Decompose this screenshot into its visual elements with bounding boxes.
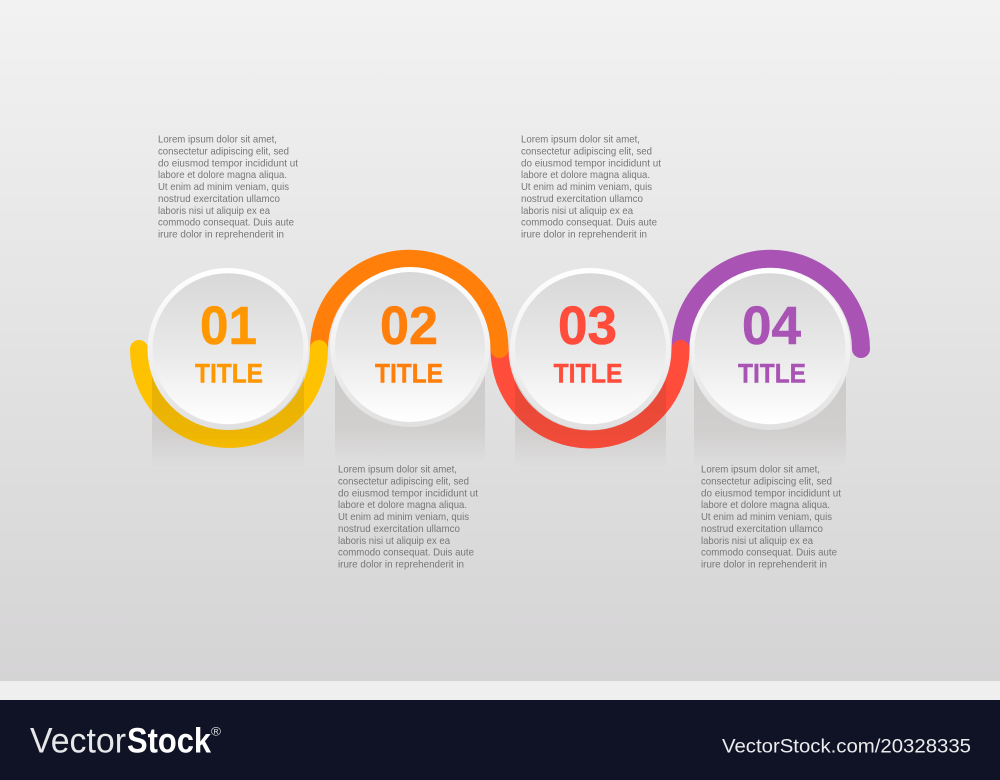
logo wordmark: Stock xyxy=(127,722,211,761)
title 01: TITLE xyxy=(195,359,263,389)
footer bar xyxy=(0,700,1000,780)
ring 01 xyxy=(148,268,308,430)
step 03 circle xyxy=(510,268,671,430)
title 04: TITLE xyxy=(738,359,806,389)
text block 02: consectetur adipiscing elit, sed xyxy=(338,475,469,487)
text block 02: Lorem ipsum dolor sit amet, xyxy=(338,464,457,476)
text block 02: do eiusmod tempor incididunt ut xyxy=(338,487,478,499)
orange arc 02 xyxy=(319,259,500,349)
red arc 03 xyxy=(500,349,680,440)
number 02: 02 xyxy=(380,296,438,356)
text block 03: labore et dolore magna aliqua. xyxy=(521,169,650,181)
text block 01: irure dolor in reprehenderit in xyxy=(158,228,284,240)
image id: VectorStock.com/20328335 xyxy=(722,737,971,758)
text block 01: laboris nisi ut aliquip ex ea xyxy=(158,205,270,217)
logo wordmark: ® xyxy=(211,724,221,738)
text block 03: irure dolor in reprehenderit in xyxy=(521,228,647,240)
text block 04: do eiusmod tempor incididunt ut xyxy=(701,487,841,499)
step 04 circle xyxy=(690,268,850,430)
text block 04: commodo consequat. Duis aute xyxy=(701,547,837,559)
text block 04: Ut enim ad minim veniam, quis xyxy=(701,511,832,523)
text block 03 xyxy=(521,134,661,240)
shadow 01 xyxy=(152,349,304,467)
face 04 xyxy=(694,273,846,424)
ring 04 xyxy=(690,268,850,430)
text block 03: commodo consequat. Duis aute xyxy=(521,217,657,229)
light band xyxy=(0,681,1000,700)
text block 01: nostrud exercitation ullamco xyxy=(158,193,280,205)
number 04: 04 xyxy=(742,296,801,356)
text block 03: Lorem ipsum dolor sit amet, xyxy=(521,134,640,146)
step 02 circle xyxy=(330,267,490,427)
logo wordmark xyxy=(30,722,221,761)
text block 01: Lorem ipsum dolor sit amet, xyxy=(158,134,277,146)
ring 02 xyxy=(330,267,490,427)
title 03: TITLE xyxy=(554,359,622,389)
text block 03: consectetur adipiscing elit, sed xyxy=(521,145,652,157)
text block 01: commodo consequat. Duis aute xyxy=(158,217,294,229)
text block 01: Ut enim ad minim veniam, quis xyxy=(158,181,289,193)
text block 03: laboris nisi ut aliquip ex ea xyxy=(521,205,633,217)
text block 01: consectetur adipiscing elit, sed xyxy=(158,145,289,157)
face 01 xyxy=(152,273,304,424)
shadow 02 xyxy=(335,349,485,462)
text block 03: Ut enim ad minim veniam, quis xyxy=(521,181,652,193)
shadow 03 xyxy=(515,349,666,467)
shadow 04 xyxy=(694,349,846,467)
text block 04: irure dolor in reprehenderit in xyxy=(701,558,827,570)
ring 03 xyxy=(510,268,671,430)
text block 02 xyxy=(338,464,478,570)
text block 02: labore et dolore magna aliqua. xyxy=(338,499,467,511)
text block 02: nostrud exercitation ullamco xyxy=(338,523,460,535)
yellow arc 01 xyxy=(139,349,319,439)
text block 04: laboris nisi ut aliquip ex ea xyxy=(701,535,813,547)
text block 03: do eiusmod tempor incididunt ut xyxy=(521,157,661,169)
face 03 xyxy=(515,273,666,424)
number 03: 03 xyxy=(558,296,617,356)
text block 04: labore et dolore magna aliqua. xyxy=(701,499,830,511)
text block 01: do eiusmod tempor incididunt ut xyxy=(158,157,298,169)
logo wordmark: Vector xyxy=(30,722,126,761)
text block 04 xyxy=(701,464,841,570)
text block 04: Lorem ipsum dolor sit amet, xyxy=(701,464,820,476)
text block 04: consectetur adipiscing elit, sed xyxy=(701,475,832,487)
text block 02: laboris nisi ut aliquip ex ea xyxy=(338,535,450,547)
purple arc 04 xyxy=(680,259,861,349)
text block 02: Ut enim ad minim veniam, quis xyxy=(338,511,469,523)
text block 02: commodo consequat. Duis aute xyxy=(338,547,474,559)
step 01 circle xyxy=(148,268,308,430)
title 02: TITLE xyxy=(375,359,443,389)
text block 03: nostrud exercitation ullamco xyxy=(521,193,643,205)
face 02 xyxy=(335,272,485,422)
text block 01 xyxy=(158,134,298,240)
text block 01: labore et dolore magna aliqua. xyxy=(158,169,287,181)
text block 02: irure dolor in reprehenderit in xyxy=(338,558,464,570)
text block 04: nostrud exercitation ullamco xyxy=(701,523,823,535)
number 01: 01 xyxy=(200,296,257,356)
